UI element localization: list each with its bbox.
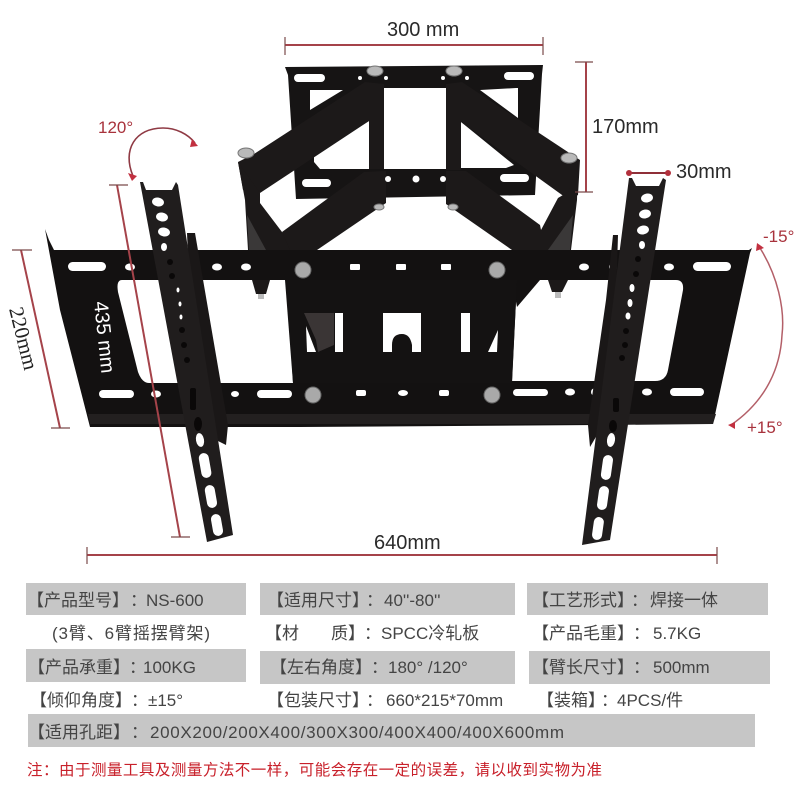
spec row 1: ： (631, 591, 648, 610)
dimension: 640mm: 640mm (374, 532, 441, 554)
tilt range (728, 227, 794, 437)
spec row 1: 焊接一体 (650, 591, 718, 610)
spec row 4: 【装箱】 (537, 691, 605, 710)
row bands (26, 583, 770, 747)
spec row 2: ： (364, 624, 381, 643)
spec row 3: 500mm (653, 658, 710, 677)
spec row 2: 【材 (265, 624, 299, 643)
disclaimer note: 注：由于测量工具及测量方法不一样，可能会存在一定的误差，请以收到实物为准 (27, 761, 602, 779)
spec row 3: 【臂长尺寸】 (532, 658, 634, 677)
right vertical bracket (582, 178, 666, 545)
spec row 1: 【适用尺寸】 (267, 591, 369, 610)
spec row 4: ： (366, 691, 383, 710)
arm: lower right (446, 171, 545, 250)
spec row 1: NS-600 (146, 591, 204, 610)
spec row 3: 【左右角度】 (270, 658, 372, 677)
spec row 2: SPCC冷轧板 (381, 624, 479, 643)
rail slots (68, 262, 731, 398)
back wall plate (285, 65, 543, 199)
spec row 3: ： (633, 658, 650, 677)
spec row 3: ： (371, 658, 388, 677)
tilt range: -15° (763, 227, 794, 246)
spec row 3: 【产品承重】 (28, 658, 130, 677)
spec row 3 (28, 658, 710, 677)
spec row 4: ： (601, 691, 618, 710)
spec row 2: 【产品毛重】 (532, 624, 634, 643)
spec row 3: 180° /120° (388, 658, 468, 677)
spec row 5: 200X200/200X400/300X300/400X400/400X600mm (150, 723, 564, 742)
spec row 1: 【产品型号】 (27, 591, 129, 610)
arm: upper right (446, 82, 580, 200)
spec row 5: 【适用孔距】 (28, 723, 130, 742)
spec row 1: 40''-80'' (384, 591, 440, 610)
dimension: 435 mm: 435 mm (89, 300, 118, 374)
spec row 4 (30, 691, 683, 710)
right window (512, 280, 683, 381)
dimension: 220mm: 220mm (4, 304, 43, 372)
spec row 1 (27, 591, 718, 610)
spec row 1: ： (366, 591, 383, 610)
dimension: 220mm (4, 250, 70, 428)
arm: lower left (282, 171, 386, 250)
spec row 1: 【工艺形式】 (532, 591, 634, 610)
dimension: 435 mm (89, 185, 190, 537)
tilt range: +15° (747, 418, 783, 437)
dimension: 170mm (575, 62, 659, 192)
spec row 2: 5.7KG (653, 624, 701, 643)
dimension: 300 mm: 300 mm (387, 19, 459, 41)
left window (118, 280, 293, 383)
dimension: 30mm (626, 161, 732, 183)
dimension: 30mm: 30mm (676, 161, 732, 183)
center plate (285, 280, 517, 383)
spec row 3: 100KG (143, 658, 196, 677)
spec row 2: (3臂、6臂摇摆臂架) (52, 624, 210, 643)
front mounting plate (45, 229, 752, 427)
rotation 120 degrees: 120° (98, 118, 133, 137)
rear pegs (252, 280, 568, 299)
arm: right post (520, 162, 578, 250)
left vertical bracket (140, 182, 233, 542)
arm bolts (238, 66, 577, 210)
spec row 5: ： (131, 723, 148, 742)
dimension: 170mm: 170mm (592, 116, 659, 138)
spec row 4: 【倾仰角度】 (30, 691, 132, 710)
spec table (26, 583, 770, 747)
rotation 120 degrees (98, 118, 198, 181)
dimension: 300 mm (285, 19, 543, 55)
spec row 4: 4PCS/件 (617, 691, 683, 710)
spec row 4: 【包装尺寸】 (267, 691, 369, 710)
spec row 4: ±15° (148, 691, 183, 710)
spec row 2 (52, 624, 701, 643)
plate bolts (295, 262, 505, 403)
spec row 4: 660*215*70mm (386, 691, 503, 710)
spec row 3: ： (129, 658, 146, 677)
dimension: 640mm (87, 532, 717, 564)
arm: left post (238, 162, 290, 250)
spec row 2: 质】 (331, 624, 365, 643)
spec row 4: ： (131, 691, 148, 710)
spec row 1: ： (130, 591, 147, 610)
swing arms (238, 82, 580, 250)
arm: upper left (238, 82, 384, 193)
spec row 2: ： (633, 624, 650, 643)
